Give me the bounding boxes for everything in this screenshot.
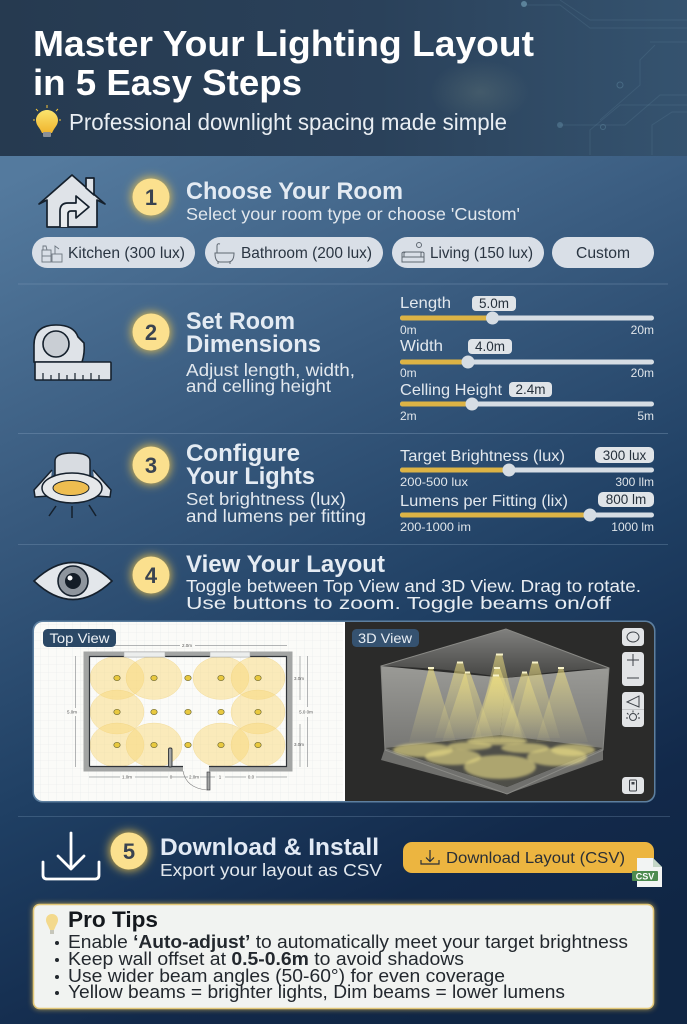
step 1 description: Select your room type or choose 'Custom': [186, 204, 520, 224]
slider: target brightness: 200-500 lux: [400, 475, 468, 489]
slider: lumens per fitting: 1000 lm: [611, 520, 654, 534]
dimension lines: 0: [170, 774, 173, 780]
slider: width: 4.0m: [475, 339, 505, 354]
top view label: Top View: [50, 630, 110, 646]
tips list: Use wider beam angles (50-60°) for even coverage: [68, 965, 505, 986]
pro tips heading: Pro Tips: [68, 907, 158, 932]
dimension lines: [67, 643, 313, 780]
icon: tip bulb: [46, 914, 58, 934]
icon: csv file: CSV: [636, 872, 654, 882]
icon: download: [43, 833, 99, 879]
step 2 description: [186, 360, 355, 396]
pill: bathroom: Bathroom (200 lux): [241, 245, 372, 262]
icon: csv file: [632, 858, 662, 887]
pill: bathroom: [205, 237, 383, 268]
step 3 heading: Your Lights: [186, 463, 315, 490]
step 2 description: and celling height: [186, 376, 331, 396]
dimension lines: 1: [219, 774, 222, 780]
step 2 heading: [186, 308, 321, 358]
slider: width: Width: [400, 338, 443, 355]
step 3 heading: [186, 440, 315, 490]
light beams: [409, 654, 588, 742]
step 1 badge: [132, 178, 170, 216]
step 3 description: Set brightness (lux): [186, 489, 346, 509]
dimension lines: 5.0m: [67, 710, 77, 714]
slider: length: 20m: [631, 323, 654, 337]
panel: pro tips: [33, 904, 654, 1009]
light fittings: [114, 675, 261, 748]
tips list: Enable ‘Auto-adjust’ to automatically meet your target brightness: [68, 931, 628, 952]
panel: step 2 room dimensions: [34, 295, 654, 423]
step 3 heading: Configure: [186, 440, 300, 467]
slider: width: 0m: [400, 366, 417, 380]
slider: target brightness: [400, 447, 654, 489]
step 1 badge: 1: [145, 185, 157, 210]
tips list: Yellow beams = brighter lights, Dim beams = lower lumens: [68, 981, 565, 1002]
step 4 badge: [132, 556, 170, 594]
subtitle: Professional downlight spacing made simple: [69, 109, 507, 135]
beam circles: [90, 656, 285, 767]
panel: layout viewer: [32, 620, 656, 802]
light fittings: [428, 654, 564, 676]
tips list: Keep wall offset at 0.5-0.6m to avoid shadows: [68, 948, 464, 969]
pill: living: Living (150 lux): [430, 245, 533, 262]
dimension lines: 5.0 0m: [299, 710, 313, 714]
dimension lines: 0.0: [248, 774, 255, 780]
dimension lines: 2.0m: [189, 774, 199, 780]
step 4 description: Use buttons to zoom. Toggle beams on/off: [186, 593, 611, 613]
panel: step 3 configure lights: [34, 440, 654, 534]
dimension lines: 2.0m: [182, 643, 192, 648]
panel: step 1 choose your room: [32, 175, 654, 268]
step 3 description: [186, 489, 366, 526]
step 2 heading: Set Room: [186, 308, 295, 335]
walls: [84, 652, 292, 790]
step 5 badge: [110, 832, 148, 870]
pill: kitchen: Kitchen (300 lux): [68, 245, 185, 262]
download button: Download Layout (CSV): [446, 850, 625, 867]
slider: ceiling height: 2m: [400, 409, 417, 423]
step 3 description: and lumens per fitting: [186, 506, 366, 526]
download button: [403, 842, 654, 873]
slider: target brightness: 300 lux: [603, 448, 647, 463]
title: Master Your Lighting Layout: [33, 23, 534, 64]
slider: length: [400, 295, 654, 337]
3D view: [345, 622, 655, 801]
slider: target brightness: 300 llm: [615, 475, 654, 489]
icon: tape measure: [34, 325, 111, 380]
panel: step 4 view layout: [32, 551, 656, 802]
slider: target brightness: Target Brightness (lux): [400, 448, 565, 465]
slider: length: 5.0m: [479, 296, 509, 311]
slider: ceiling height: Celling Height: [400, 382, 503, 399]
step 5 description: Export your layout as CSV: [160, 860, 382, 880]
3D view label: 3D View: [358, 630, 413, 646]
room shell: [381, 748, 603, 794]
step 1 heading: Choose Your Room: [186, 178, 403, 205]
title: [33, 23, 534, 103]
slider: length: Length: [400, 295, 451, 312]
icon: eye: [34, 562, 112, 600]
icon: downlight: [34, 453, 111, 518]
step 3 badge: [132, 446, 170, 484]
pill: custom: Custom: [576, 245, 630, 262]
dimension lines: 3.0m: [294, 742, 304, 747]
panel: step 5 download: [43, 832, 662, 887]
slider: lumens per fitting: 800 lm: [606, 492, 646, 507]
step 2 badge: 2: [145, 320, 157, 345]
floor light pools: [393, 737, 595, 779]
step 5 heading: Download & Install: [160, 834, 379, 861]
step 4 heading: View Your Layout: [186, 551, 385, 578]
slider: lumens per fitting: [400, 492, 654, 534]
slider: width: 20m: [631, 366, 654, 380]
icon: light bulb: [33, 105, 61, 137]
3D view label: [352, 629, 419, 647]
icon: house with arrow: [39, 175, 105, 227]
step 4 description: [186, 576, 641, 613]
slider: ceiling height: [400, 382, 654, 423]
slider: width: [400, 338, 654, 380]
top view floor plan: [34, 622, 345, 801]
step 4 badge: 4: [145, 563, 158, 588]
slider: ceiling height: 5m: [637, 409, 654, 423]
step 3 badge: 3: [145, 453, 157, 478]
pill: kitchen: [32, 237, 195, 268]
top view label: [43, 629, 116, 647]
pill: living: [392, 237, 544, 268]
step 2 heading: Dimensions: [186, 331, 321, 358]
header band: [0, 0, 687, 156]
tips list: [55, 931, 628, 1002]
pill: custom: [552, 237, 654, 268]
dimension lines: 3.0m: [294, 676, 304, 681]
slider: lumens per fitting: 200-1000 im: [400, 520, 471, 534]
step 5 badge: 5: [123, 839, 135, 864]
dimension lines: 1.0m: [122, 774, 132, 780]
slider: length: 0m: [400, 323, 417, 337]
step 2 description: Adjust length, width,: [186, 360, 355, 380]
step 4 description: Toggle between Top View and 3D View. Drag to rotate.: [186, 576, 641, 596]
slider: ceiling height: 2.4m: [515, 382, 546, 397]
title: in 5 Easy Steps: [33, 62, 302, 103]
viewer controls: [622, 628, 644, 794]
slider: lumens per fitting: Lumens per Fitting (lix): [400, 493, 568, 510]
step 2 badge: [132, 313, 170, 351]
